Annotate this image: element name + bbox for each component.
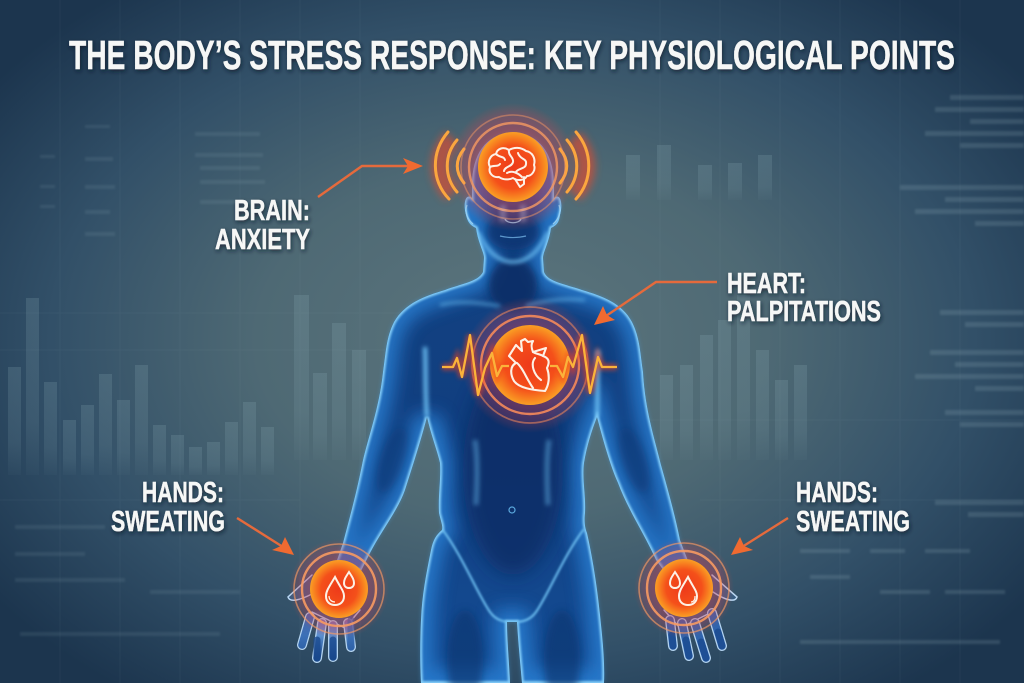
label: heart: PALPITATIONS	[727, 296, 881, 328]
rings	[639, 543, 729, 633]
rings	[294, 544, 384, 634]
face features	[466, 205, 560, 238]
rings	[472, 307, 588, 423]
label: left hands: HANDS:	[142, 477, 224, 509]
background data lines: right	[800, 95, 1024, 644]
arrow: left hands	[237, 518, 294, 555]
navel	[509, 507, 515, 513]
label: brain	[215, 195, 310, 256]
body inner glow	[335, 133, 690, 683]
label: right hands: SWEATING	[796, 506, 910, 538]
label: left hands: SWEATING	[111, 506, 225, 538]
sound wave arcs	[435, 132, 589, 199]
arrow: right hands	[731, 518, 788, 555]
sound wave glow	[440, 138, 586, 194]
icon: heart	[509, 339, 549, 391]
label: right hands	[796, 477, 910, 538]
palm outline	[288, 575, 360, 628]
right hand hotspot	[634, 538, 734, 638]
heart hotspot	[442, 297, 617, 433]
icon: water drops	[326, 572, 354, 605]
arrow: heart	[594, 282, 717, 325]
label: brain: ANXIETY	[215, 224, 310, 256]
icon: water drops	[670, 572, 697, 605]
label: heart: HEART:	[727, 268, 806, 300]
ECG glow	[442, 335, 617, 395]
icon: brain	[489, 148, 535, 187]
ECG line	[442, 335, 617, 395]
label: heart	[727, 268, 881, 328]
hand left	[288, 575, 360, 658]
muscle highlights	[425, 232, 598, 505]
left hand hotspot	[289, 539, 389, 639]
palm outline	[664, 575, 737, 628]
background data lines: left	[15, 125, 265, 636]
arrow: brain	[318, 158, 423, 197]
label: brain: BRAIN:	[234, 195, 310, 227]
brain hotspot	[435, 103, 589, 231]
forehead streaks	[503, 205, 523, 222]
rings	[461, 115, 565, 219]
hand right	[664, 575, 737, 658]
inguinal V line	[442, 529, 584, 622]
dark centre shading	[463, 365, 563, 575]
label: left hands	[111, 477, 225, 538]
background data bars	[8, 145, 807, 475]
label: right hands: HANDS:	[796, 477, 878, 509]
human body figure	[335, 133, 690, 683]
